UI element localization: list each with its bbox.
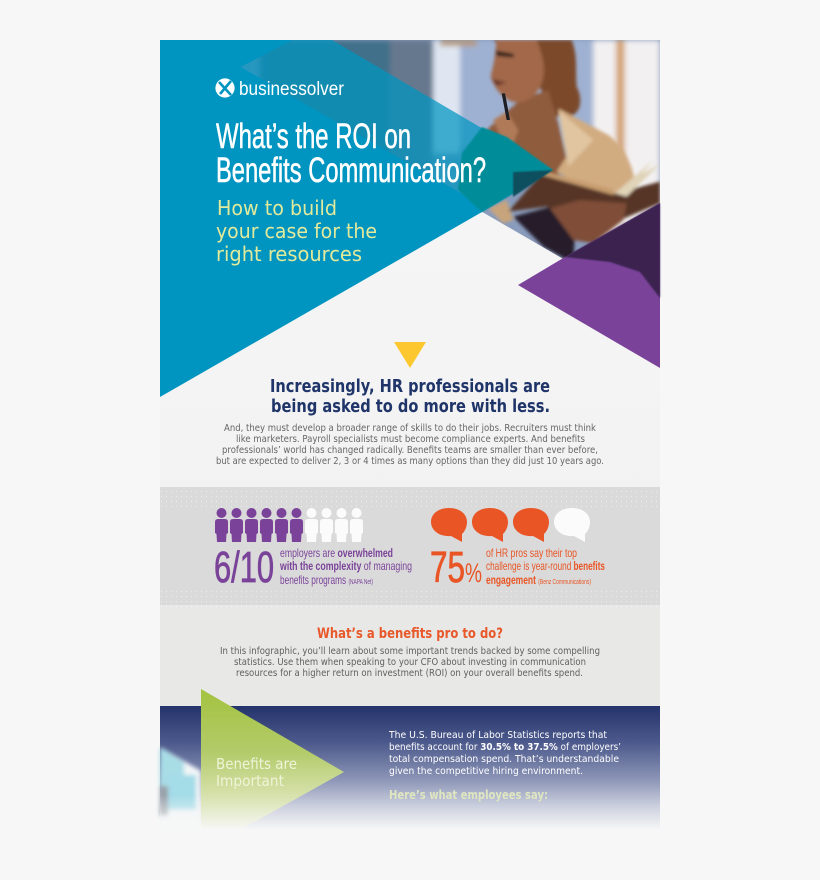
- labor statistics text: given the competitive hiring environment.: [389, 766, 583, 777]
- blazer: [557, 108, 635, 200]
- subtitle: How to build: [217, 196, 337, 220]
- subtitle: right resources: [216, 242, 362, 266]
- title: What’s the ROI on: [216, 117, 411, 156]
- intro text: like marketers. Payroll specialists must become compliance experts. And benefits: [236, 434, 585, 445]
- hair: [493, 40, 580, 117]
- icon row: ten people: [215, 508, 363, 542]
- panel: statistics band: [160, 487, 660, 605]
- stat: 6/10: 6/10: [214, 543, 274, 592]
- page background: [160, 40, 660, 830]
- title: [216, 117, 486, 190]
- stat: 75%: of HR pros say their top: [486, 546, 577, 560]
- labor statistics text: total compensation spend. That’s understandable: [389, 754, 619, 765]
- stat: 6/10: with the complexity of managing: [279, 559, 412, 573]
- hand on book: [550, 200, 627, 243]
- hero photo: woman holding a notebook: [241, 40, 660, 258]
- infographic: [157, 40, 662, 826]
- heading: more with less: Increasingly, HR professionals are: [270, 376, 550, 397]
- labor statistics text: benefits account for 30.5% to 37.5% of employers’: [389, 742, 621, 753]
- body text: resources for a higher return on investment (ROI) on your overall benefits spend.: [236, 668, 583, 679]
- employees say subheading: Here’s what employees say:: [389, 788, 548, 802]
- intro text: And, they must develop a broader range of skills to do their jobs. Recruiters must think: [224, 423, 596, 434]
- labor statistics text: The U.S. Bureau of Labor Statistics reports that: [388, 730, 607, 741]
- icon: yellow down arrow: [394, 342, 426, 368]
- panel: what's a benefits pro to do: [160, 605, 660, 706]
- icon row: speech bubbles: [431, 508, 590, 542]
- neck and chest: [487, 90, 568, 183]
- subtitle: [216, 196, 377, 266]
- body text: In this infographic, you’ll learn about some important trends backed by some compelling: [220, 646, 600, 657]
- stat: 6/10: benefits programs (NAPA Net): [280, 573, 373, 587]
- stat: 6/10: employers are overwhelmed: [280, 546, 393, 560]
- six purple people: [215, 508, 303, 542]
- labor statistics text: [388, 730, 621, 777]
- intro text: [216, 423, 604, 467]
- stat: 75%: engagement (Benz Communications): [486, 573, 591, 587]
- heading: What’s a benefits pro to do?: [317, 626, 503, 642]
- stat: 75%: 75: [430, 543, 465, 592]
- intro text: professionals’ world has changed radically. Benefits teams are smaller than ever before,: [222, 445, 598, 456]
- dark skirt: [512, 205, 577, 258]
- blue triangle overlay: [160, 40, 553, 397]
- stat: 75%: challenge is year-round benefits: [486, 559, 605, 573]
- green triangle: [201, 689, 344, 830]
- subtitle: your case for the: [216, 219, 377, 243]
- label: [216, 755, 297, 790]
- photo fragment: [160, 747, 201, 830]
- heading: more with less: being asked to do more with less.: [271, 396, 550, 417]
- body text: statistics. Use them when speaking to your CFO about investing in communication: [234, 657, 586, 668]
- body text: [220, 646, 600, 679]
- hand and pen: [493, 112, 518, 143]
- teal jacket sleeve: [458, 127, 553, 212]
- label: Benefits are: [216, 755, 297, 773]
- stat: 75%: [430, 543, 605, 592]
- purple triangle: [518, 203, 660, 368]
- stat: 6/10: [214, 543, 412, 592]
- panel: benefits are important: [160, 689, 660, 830]
- logo: businessolver: businessolver: [239, 79, 345, 100]
- title: Benefits Communication?: [216, 151, 486, 190]
- label: Important: [216, 772, 284, 790]
- intro text: but are expected to deliver 2, 3 or 4 times as many options than they did just 10 years ago.: [216, 456, 604, 467]
- heading: more with less: [270, 376, 550, 417]
- face: [491, 40, 544, 102]
- four white people: [305, 508, 363, 542]
- stat: 75%: %: [465, 558, 482, 588]
- open notebook: [508, 176, 660, 220]
